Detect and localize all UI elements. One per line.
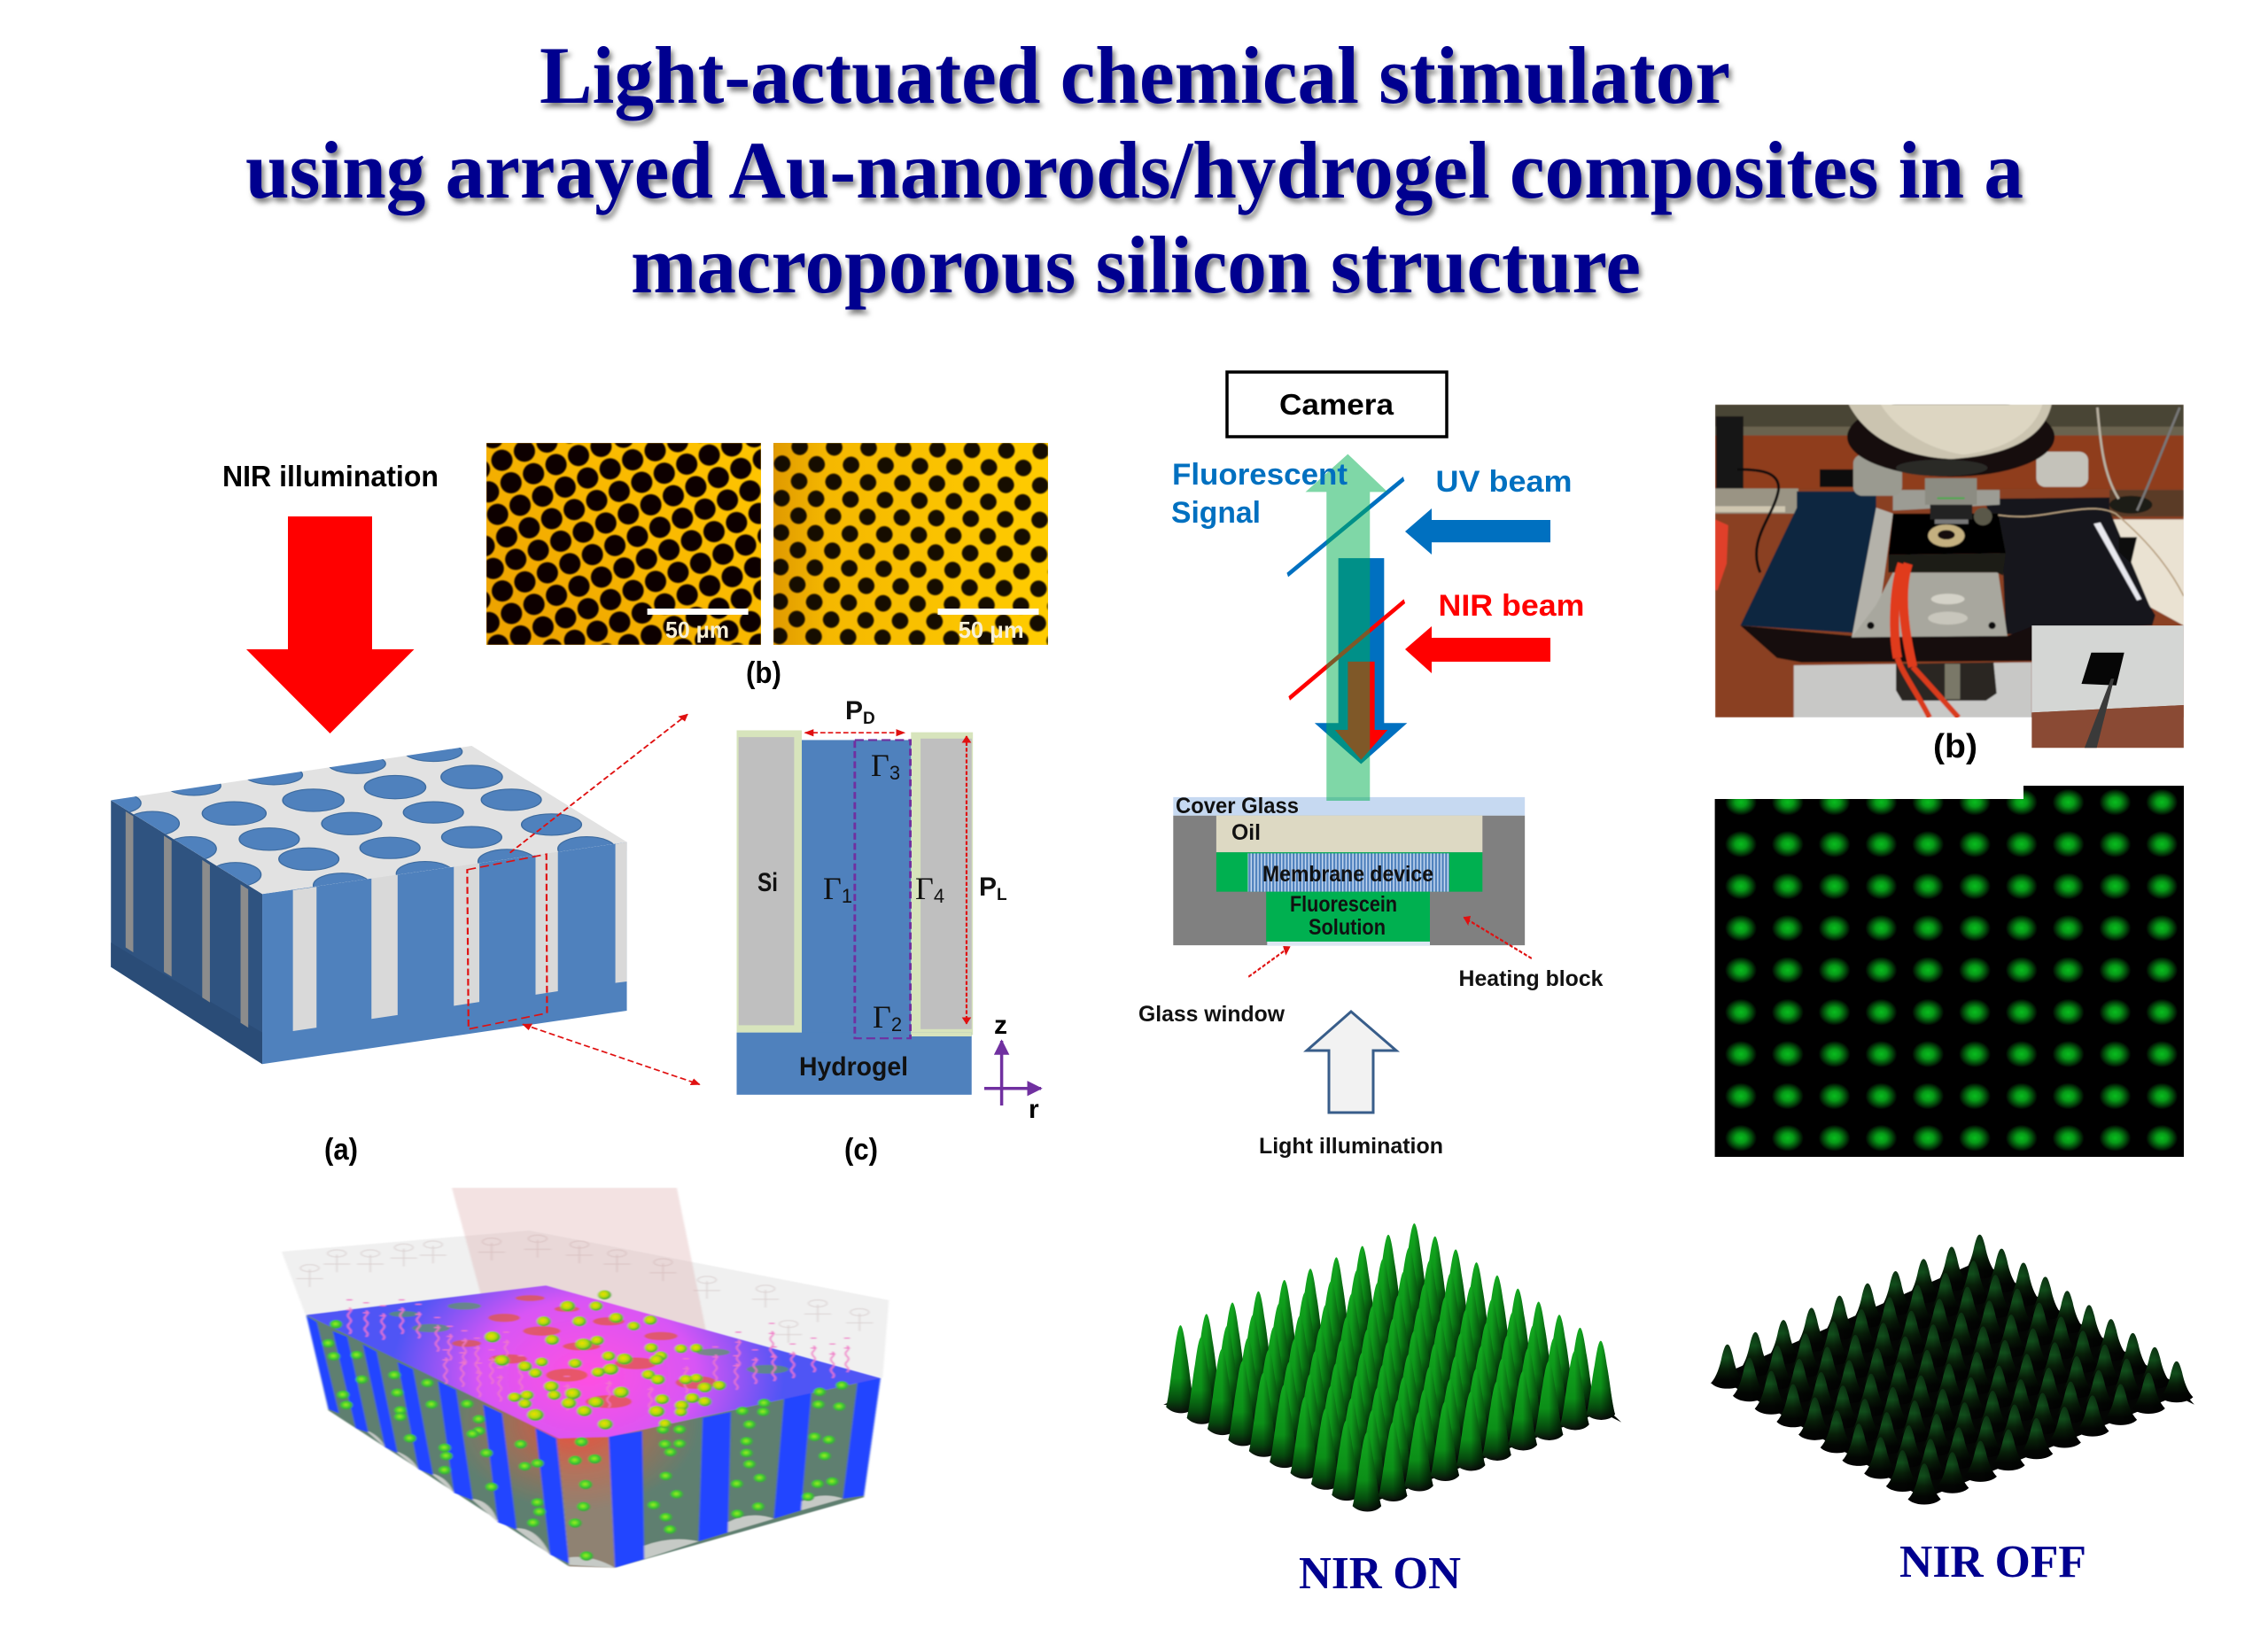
3D NIR-actuated structure: [282, 1188, 889, 1568]
labels: sample holder: Fluorescein: [1290, 892, 1397, 917]
labels: cross-section: Hydrogel: [799, 1052, 908, 1082]
label: (b) micrographs: (b): [746, 656, 781, 690]
labels: sample holder: Oil: [1231, 820, 1261, 845]
label: NIR illumination: NIR illumination: [222, 460, 439, 493]
labels: cross-section: Si: [757, 868, 778, 897]
labels: cross-section: Γ: [823, 871, 842, 906]
label: NIR OFF: NIR OFF: [1899, 1537, 2086, 1587]
labels: cross-section: P: [979, 873, 997, 902]
labels: sample holder: Glass window: [1138, 1002, 1285, 1027]
photo: membrane micrograph 2: 50 μm: [959, 617, 1024, 643]
photo: membrane micrograph 1: [486, 443, 761, 645]
labels: beams: Fluorescent: [1172, 458, 1348, 492]
labels: sample holder: [1138, 794, 1604, 1159]
axes: z and r: r: [1029, 1095, 1039, 1124]
photo: membrane micrograph 1: 50 μm: [665, 617, 729, 643]
arrow: NIR input: [1405, 626, 1550, 673]
beam path with arrows and mirrors: [1287, 454, 1407, 801]
cross-section diagram (c): [737, 730, 973, 1095]
arrow: NIR illumination red arrow: [246, 516, 415, 733]
fluorescence image: [1715, 786, 2184, 1157]
labels: cross-section: 2: [891, 1013, 902, 1036]
labels: cross-section: L: [997, 886, 1007, 904]
labels: sample holder: Heating block: [1458, 966, 1604, 991]
labels: sample holder: Cover Glass: [1176, 794, 1299, 818]
title: macroporous silicon structure: [631, 220, 1641, 310]
label: NIR ON: NIR ON: [1299, 1548, 1461, 1599]
title: [245, 30, 2023, 310]
arrow: light illumination: [1307, 1012, 1396, 1113]
labels: cross-section: Γ: [915, 871, 934, 906]
labels: cross-section: Γ: [873, 999, 891, 1035]
3D surface plot: NIR OFF: [1711, 1235, 2194, 1505]
camera box: [1227, 372, 1447, 437]
photo: membrane micrograph 2: [773, 443, 1048, 645]
labels: cross-section: D: [863, 710, 875, 728]
label: (c): (c): [844, 1133, 878, 1167]
arrow: UV input: [1405, 508, 1550, 555]
labels: cross-section: Γ: [871, 748, 889, 783]
title: Light-actuated chemical stimulator: [540, 30, 1730, 120]
title: using arrayed Au-nanorods/hydrogel composites in a: [245, 125, 2023, 215]
labels: cross-section: P: [845, 696, 863, 725]
axes: z and r: z: [994, 1011, 1007, 1040]
label: (b) setup: (b): [1933, 728, 1977, 765]
labels: sample holder: Membrane device: [1262, 862, 1433, 887]
axes: z and r: [984, 1011, 1041, 1124]
label: (a): (a): [324, 1133, 358, 1167]
3D surface plot: NIR ON: [1163, 1223, 1621, 1511]
labels: cross-section: 4: [934, 885, 944, 907]
3D block diagram (a): [100, 714, 700, 1084]
sample holder cross-section: [1173, 797, 1532, 977]
labels: cross-section: 1: [842, 885, 852, 907]
photo: microscope setup: [1715, 397, 2184, 718]
labels: sample holder: Solution: [1309, 915, 1386, 940]
labels: cross-section: [757, 696, 1007, 1082]
labels: beams: [1171, 458, 1584, 623]
camera box: Camera: [1279, 388, 1394, 421]
labels: beams: Signal: [1171, 496, 1261, 530]
inset: chip on tweezers: [2031, 625, 2184, 748]
labels: beams: UV beam: [1435, 465, 1572, 499]
labels: beams: NIR beam: [1439, 589, 1584, 623]
labels: cross-section: 3: [889, 762, 900, 784]
labels: sample holder: Light illumination: [1259, 1134, 1443, 1159]
